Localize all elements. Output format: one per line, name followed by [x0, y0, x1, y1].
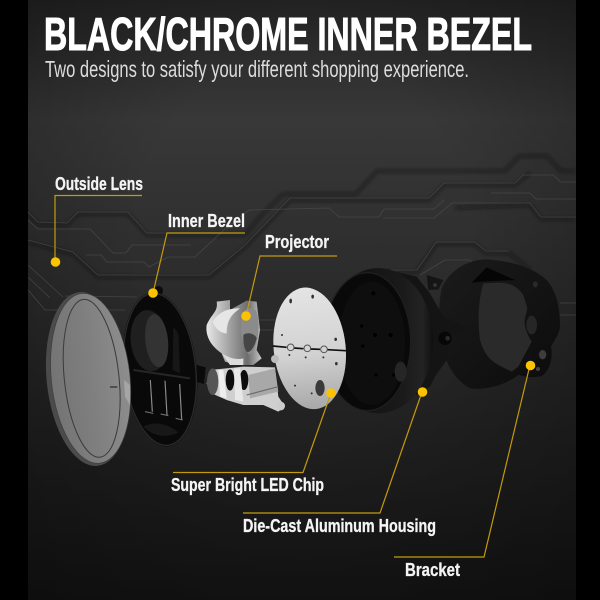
part: projector	[206, 300, 285, 412]
part: bracket	[427, 259, 560, 389]
callout: inner bezel	[148, 211, 245, 298]
callout: bracket: Bracket	[405, 560, 460, 580]
callout: outside lens	[51, 174, 143, 267]
circuit line pattern	[28, 156, 576, 330]
callout: inner bezel: Inner Bezel	[168, 211, 245, 231]
callout: bracket	[394, 361, 535, 580]
callout: housing: Die-Cast Aluminum Housing	[243, 516, 436, 536]
callout: LED chip: Super Bright LED Chip	[171, 475, 324, 495]
callout: outside lens: Outside Lens	[55, 174, 143, 194]
callout: LED chip	[171, 388, 336, 495]
part: die-cast aluminum housing	[323, 268, 467, 413]
part: outside lens	[38, 288, 139, 470]
callout: projector: Projector	[265, 232, 329, 252]
part: inner bezel	[115, 286, 206, 450]
callout: projector	[241, 232, 337, 321]
part: LED chip plate	[267, 284, 352, 413]
callout: housing	[243, 387, 436, 536]
